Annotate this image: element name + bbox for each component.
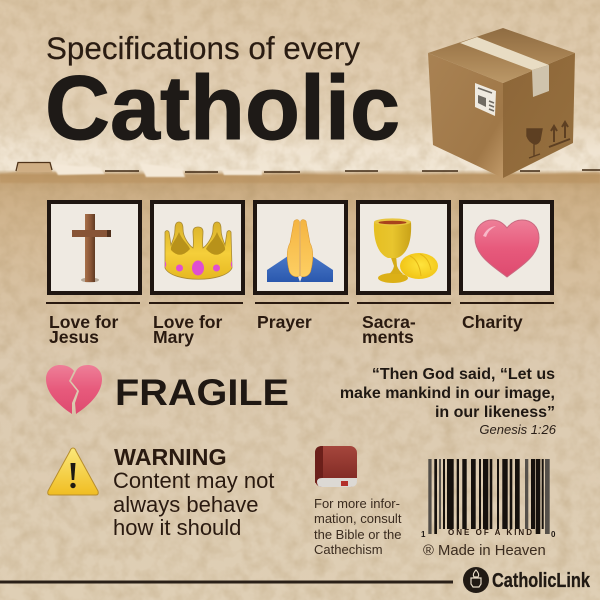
warning text: WARNING [114, 444, 227, 470]
bible quote: Genesis 1:26 [479, 422, 557, 437]
barcode digit 0: 0 [551, 530, 556, 539]
panel: Charity [460, 202, 554, 332]
label: Sacra- [362, 312, 416, 332]
label: Love for [153, 312, 223, 332]
title line: Catholic: Catholic [45, 58, 400, 159]
label: ments [362, 327, 414, 347]
logo: CatholicLink [463, 567, 591, 593]
text: more information: Cathechism [314, 542, 383, 557]
panel: Love for Mary [149, 202, 243, 347]
warning text [113, 444, 274, 540]
bible quote [340, 366, 557, 437]
icon: chalice and bread [358, 202, 449, 293]
torn cardboard edge [0, 162, 600, 183]
icon: broken heart [46, 365, 102, 414]
text: more information: mation, consult [314, 511, 402, 526]
barcode digit 1: 1 [421, 530, 426, 539]
title [45, 31, 400, 159]
warning text: Content may not [113, 468, 274, 493]
warning text: always behave [113, 492, 259, 517]
barcode label: ONE OF A KIND [448, 528, 532, 537]
icon: pink heart [461, 202, 552, 293]
footer rule [0, 580, 453, 584]
warning text: how it should [113, 515, 241, 540]
panel: Love for Jesus [46, 202, 140, 347]
heading: FRAGILE: FRAGILE [115, 371, 289, 413]
logo mark [463, 567, 489, 593]
label: Jesus [49, 327, 99, 347]
text: more information: the Bible or the [314, 527, 401, 542]
text: more information: For more infor- [314, 496, 400, 511]
bible quote: make mankind in our image, [340, 385, 555, 402]
bible quote: “Then God said, “Let us [372, 366, 555, 383]
icon: cross [49, 202, 140, 293]
label: Charity [462, 312, 523, 332]
icon: praying hands [255, 202, 346, 293]
icon: red book [315, 446, 357, 487]
panel: Prayer [255, 202, 349, 332]
title line: Specifications of every: Specifications of every [46, 31, 360, 66]
icon: crown [152, 202, 243, 293]
label: Love for [49, 312, 119, 332]
label: Prayer [257, 312, 312, 332]
bible quote: in our likeness” [435, 404, 555, 421]
icon: warning triangle [48, 448, 98, 495]
text: made in heaven: ® Made in Heaven [423, 543, 546, 559]
label: Mary [153, 327, 194, 347]
panel: Sacraments [357, 202, 451, 347]
barcode [421, 459, 556, 539]
icon: cardboard package [428, 28, 575, 178]
